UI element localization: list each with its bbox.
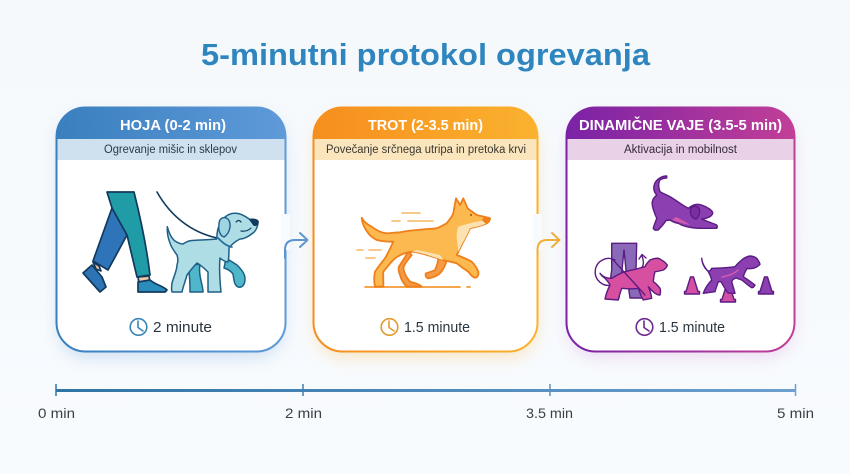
subheading: dinamične vaje: Aktivacija in mobilnost (624, 144, 738, 156)
heading: trot: TROT (2-3.5 min) (368, 118, 483, 134)
duration: 2 minute: 2 minute (153, 320, 212, 336)
duration: 2 minute (130, 319, 212, 336)
duration: 1.5 minute: 1.5 minute (659, 320, 725, 336)
timeline label: 5 min: 5 min (777, 406, 814, 421)
panel: dinamične vaje (566, 107, 795, 358)
illustration: play bow dog (652, 176, 717, 230)
panel: hoja (56, 107, 290, 358)
infographic (38, 43, 814, 418)
arrow: hoja to trot (285, 233, 308, 258)
duration: 1.5 minute: 1.5 minute (404, 320, 470, 336)
illustration: trotting dog (357, 198, 490, 287)
illustration: dog weaving through legs (595, 243, 667, 300)
illustration: person walking a dog (83, 192, 258, 292)
subheading: trot: Povečanje srčnega utripa in pretoka krvi (326, 144, 526, 156)
subheading: hoja: Ogrevanje mišic in sklepov (104, 144, 237, 156)
timeline (38, 384, 814, 421)
panel: trot (313, 107, 542, 358)
duration: 1.5 minute (381, 319, 470, 336)
timeline label: 0 min: 0 min (38, 406, 75, 421)
illustration: dog among cones (684, 256, 774, 302)
title: 5-minutni protokol ogrevanja (201, 37, 651, 72)
heading: hoja: HOJA (0-2 min) (120, 118, 226, 134)
heading: dinamične vaje: DINAMIČNE VAJE (3.5-5 min) (579, 116, 782, 134)
timeline label: 2 min: 2 min (285, 406, 322, 421)
duration: 1.5 minute (636, 319, 725, 336)
timeline label: 3.5 min: 3.5 min (526, 406, 573, 421)
arrow: trot to dynamic exercises (538, 233, 560, 256)
